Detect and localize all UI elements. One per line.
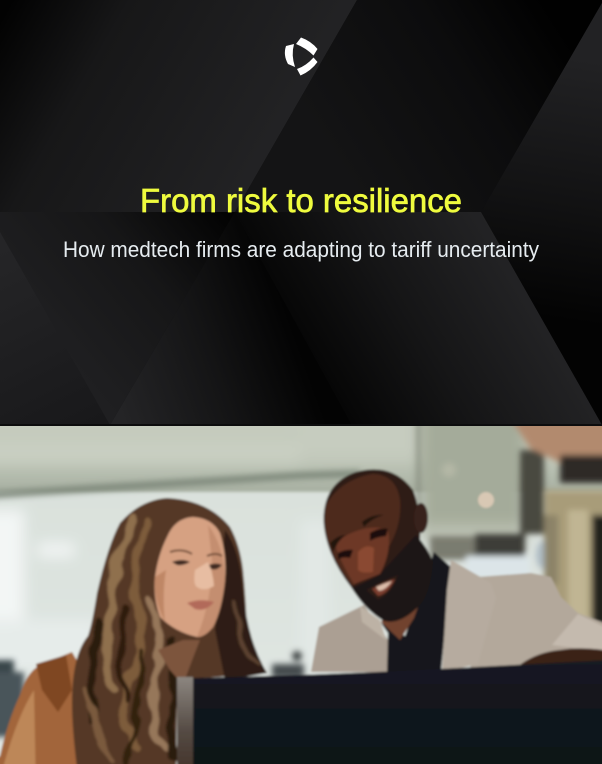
woman with long wavy hair xyxy=(0,498,267,764)
office background xyxy=(0,400,602,764)
title: From risk to resilience xyxy=(140,182,462,219)
photo: two colleagues looking at a monitor in an office xyxy=(0,400,602,764)
man in beige blazer xyxy=(311,469,602,672)
subtitle: How medtech firms are adapting to tariff uncertainty xyxy=(63,237,539,262)
foreground computer monitor xyxy=(177,659,602,764)
icon: white company logo xyxy=(285,38,318,76)
dark faceted header panel xyxy=(0,0,602,426)
